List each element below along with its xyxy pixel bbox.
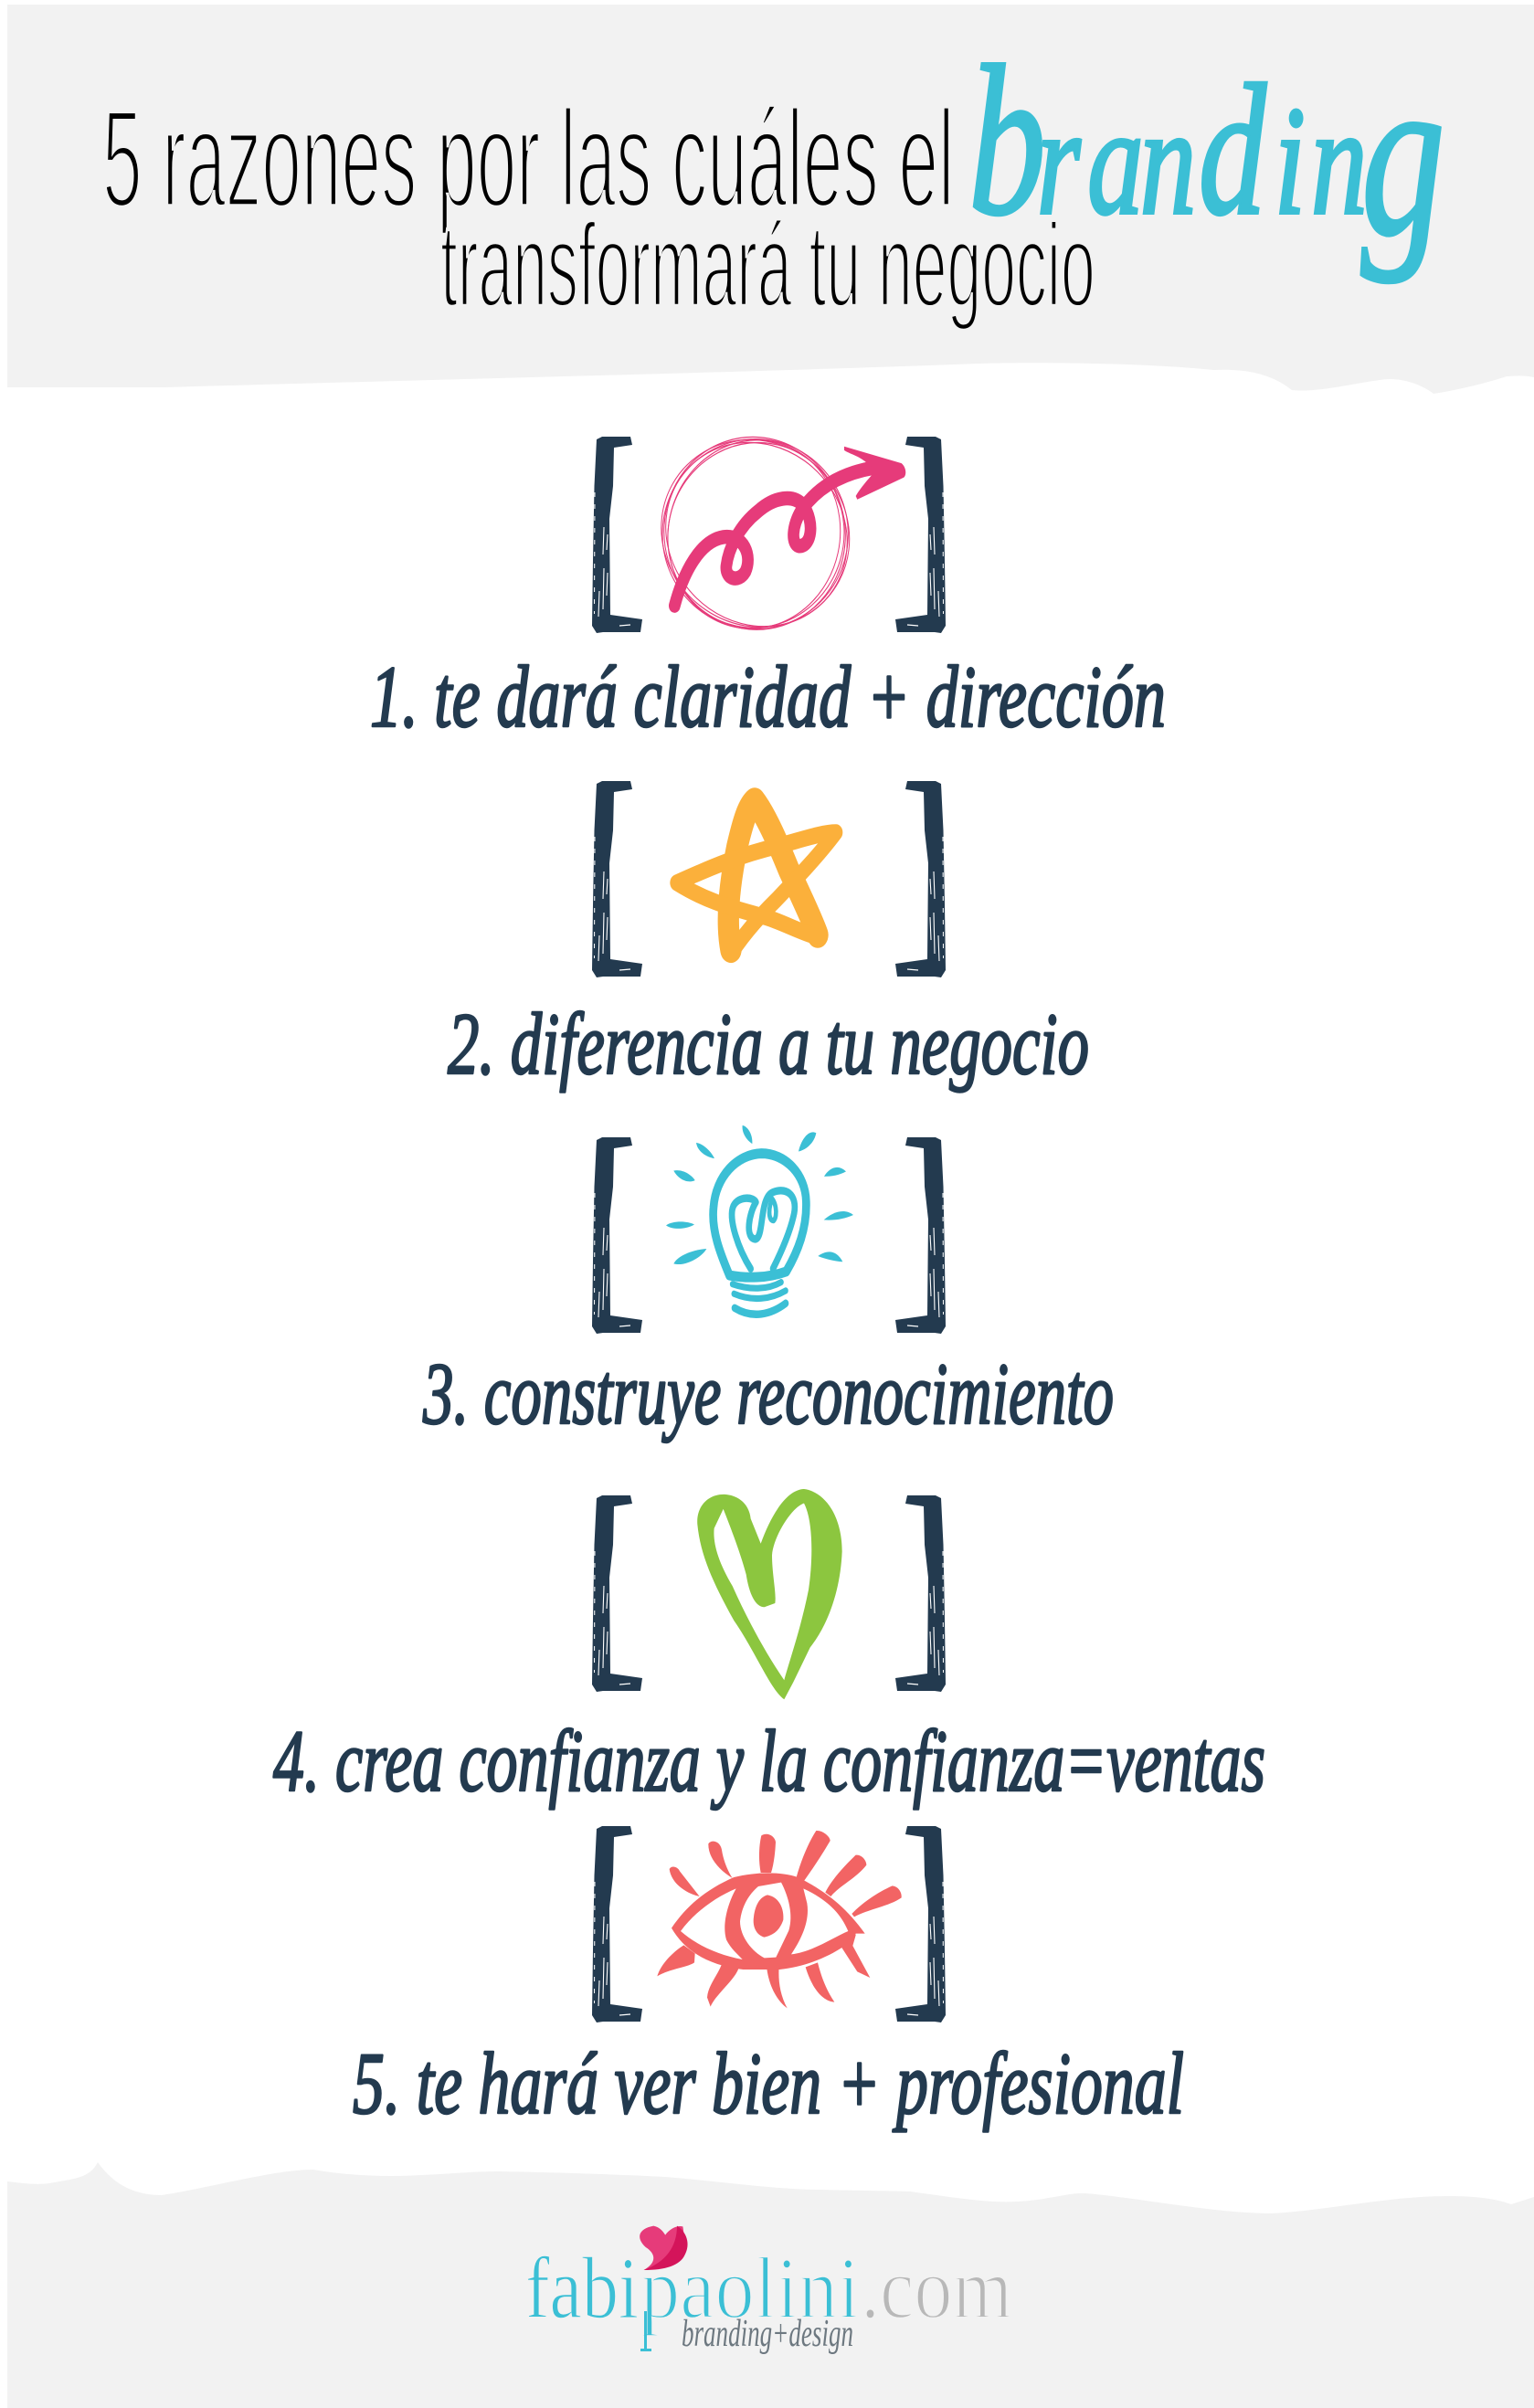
icon: eye bbox=[657, 1831, 902, 2008]
title script word: n bbox=[1311, 76, 1367, 248]
right bracket bbox=[895, 1495, 946, 1692]
bottom footer panel bbox=[7, 2162, 1534, 2408]
icon: circle with arrow bbox=[651, 422, 905, 647]
logo domain: .com bbox=[861, 2239, 1012, 2337]
logo name part 2: paolini bbox=[640, 2239, 860, 2337]
title script word: g bbox=[1361, 26, 1445, 284]
panel: reason 3 bbox=[422, 1125, 1114, 1442]
logo heart bbox=[640, 2226, 688, 2270]
icon: heart bbox=[697, 1489, 842, 1699]
logo tagline: branding+design bbox=[682, 2313, 853, 2355]
top banner panel bbox=[7, 5, 1534, 394]
right bracket bbox=[895, 1826, 946, 2023]
title script word: d bbox=[1199, 47, 1266, 254]
title line 1: 5 razones por las cuáles el bbox=[102, 81, 954, 237]
panel: reason 2 bbox=[448, 781, 1089, 1093]
panel: reason 5 bbox=[353, 1826, 1184, 2132]
left bracket bbox=[592, 1495, 642, 1692]
label 3: 3. construye reconocimiento bbox=[422, 1345, 1114, 1442]
title script word: i bbox=[1275, 76, 1306, 248]
label 1: 1. te dará claridad + dirección bbox=[370, 648, 1166, 745]
panel: reason 4 bbox=[273, 1489, 1265, 1810]
right bracket bbox=[895, 781, 946, 977]
title script word: r bbox=[1037, 76, 1082, 248]
left bracket bbox=[592, 781, 642, 977]
logo p stem bbox=[640, 2311, 651, 2351]
left bracket bbox=[592, 437, 642, 633]
icon: star bbox=[677, 801, 836, 952]
logo name: fabi bbox=[525, 2239, 639, 2337]
panel: reason 1 bbox=[370, 422, 1166, 745]
label 5: 5. te hará ver bien + profesional bbox=[353, 2034, 1184, 2132]
logo bbox=[525, 2226, 1012, 2355]
icon: light bulb bbox=[666, 1125, 853, 1315]
title bbox=[102, 23, 1445, 332]
left bracket bbox=[592, 1137, 642, 1334]
title line 2: transformará tu negocio bbox=[440, 198, 1095, 332]
right bracket bbox=[895, 1137, 946, 1334]
title script word: n bbox=[1140, 76, 1196, 248]
title script word: a bbox=[1087, 76, 1144, 248]
label 2: 2. diferencia a tu negocio bbox=[448, 995, 1089, 1093]
title script word: b bbox=[968, 23, 1046, 260]
right bracket bbox=[895, 437, 946, 633]
left bracket bbox=[592, 1826, 642, 2023]
